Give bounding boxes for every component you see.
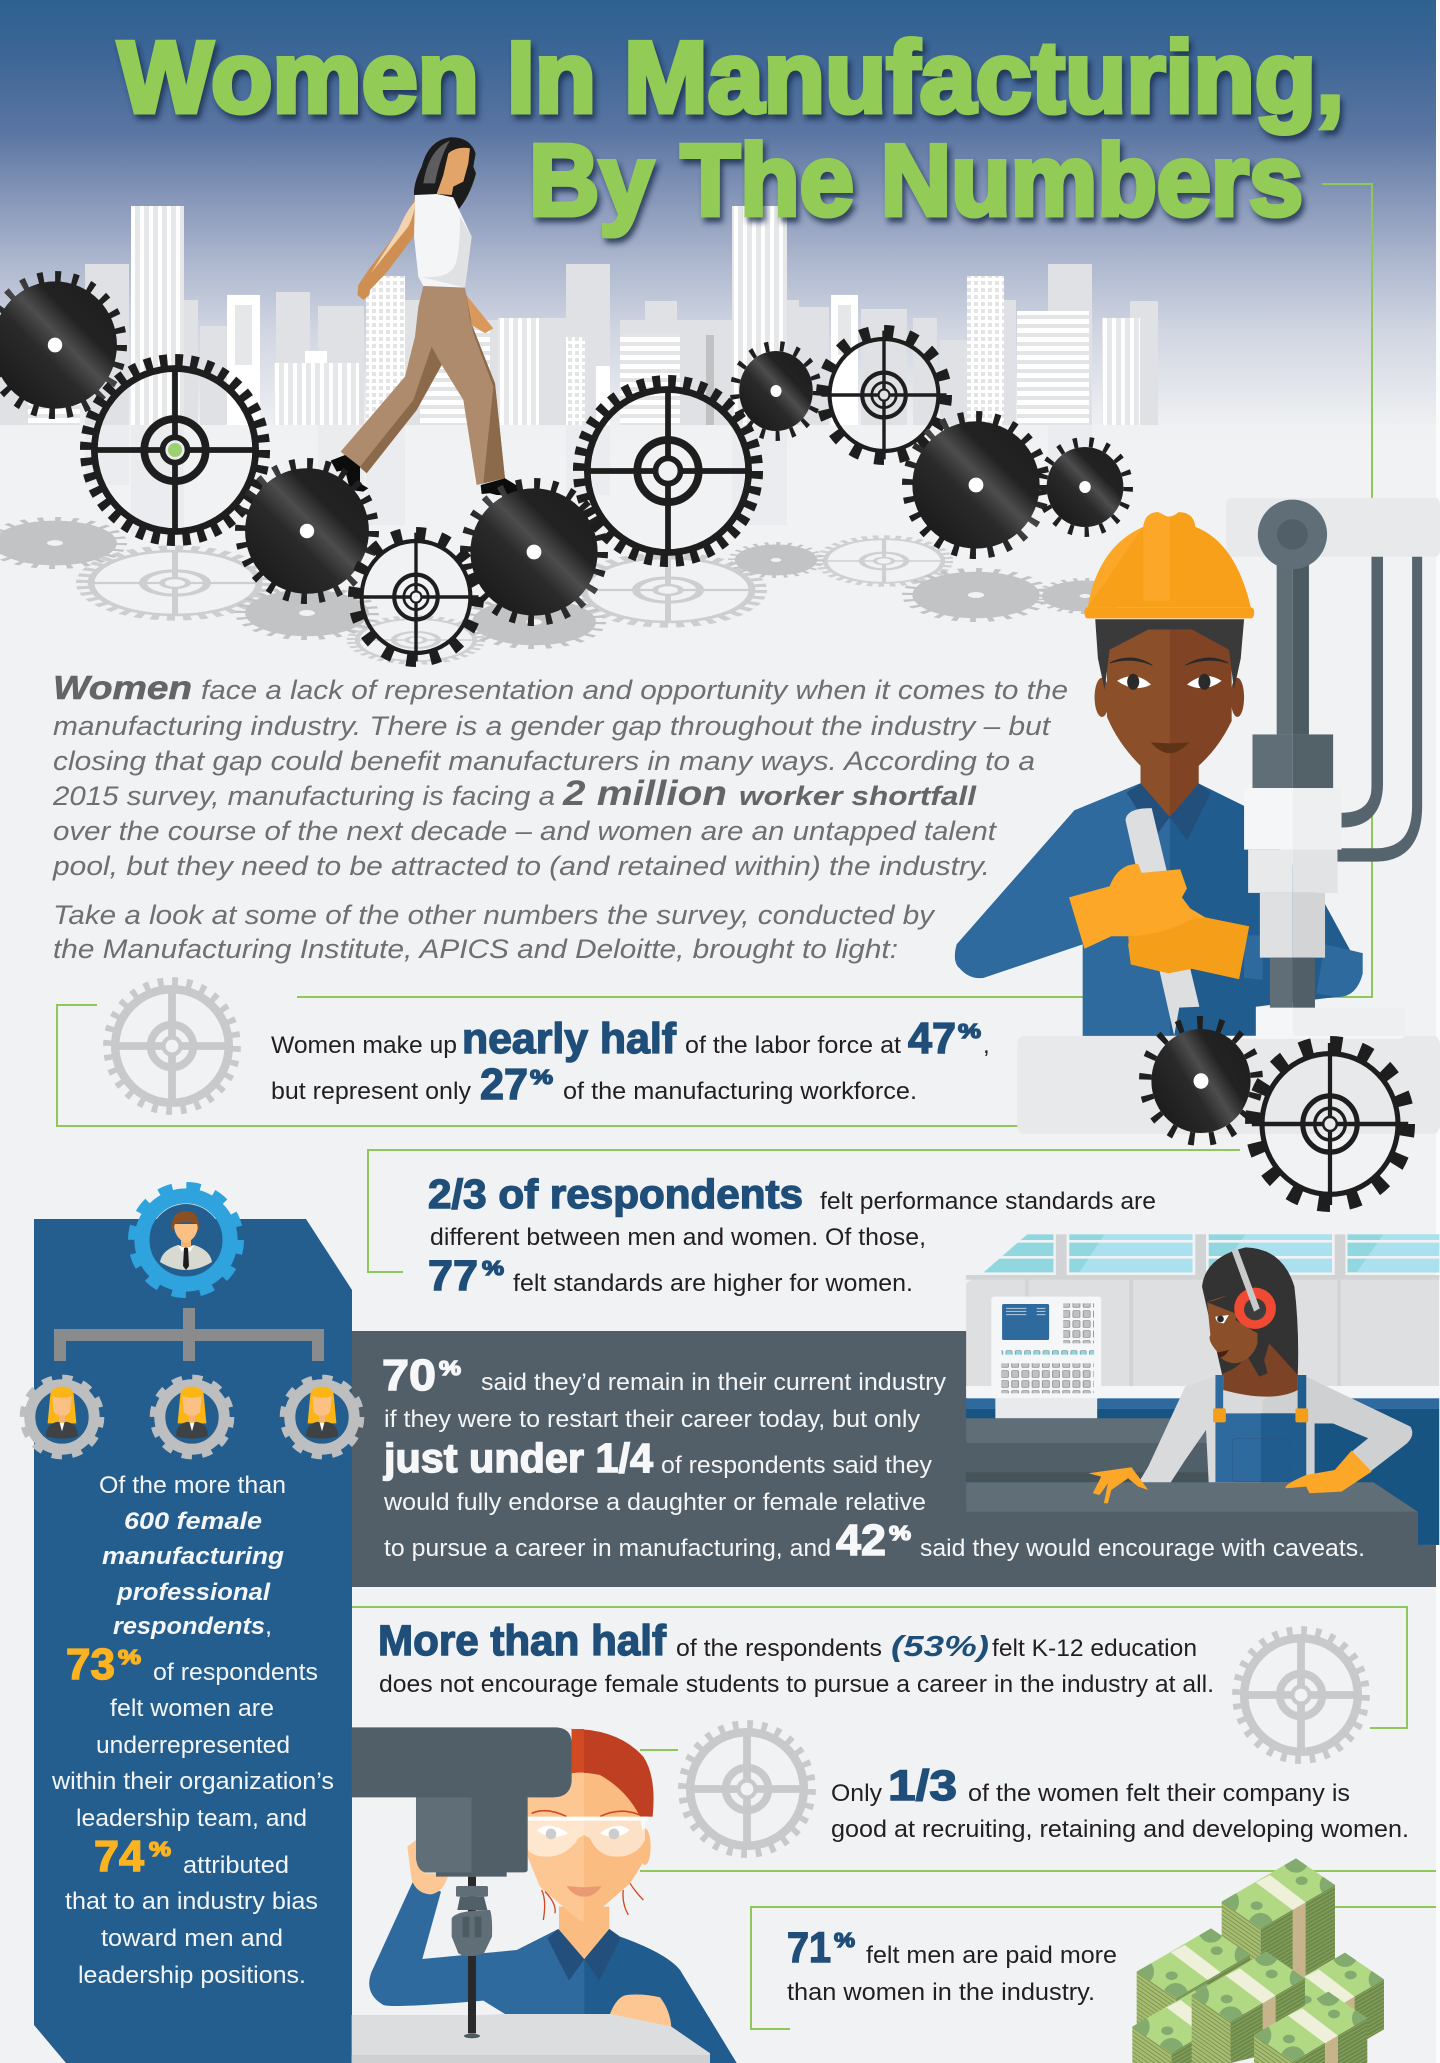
sidebar text: 74 <box>94 1832 145 1881</box>
icon: gray gear, labor force <box>108 982 236 1110</box>
stat: only 1/3: good at recruiting, retaining and developing women. <box>831 1816 1409 1843</box>
stat: more than half <box>378 1617 1214 1698</box>
hair back, neck, face <box>1202 1247 1298 1377</box>
stat: 71 percent <box>787 1924 1117 2006</box>
stat: 2/3 of respondents: different between men and women. Of those, <box>430 1224 926 1251</box>
control panel <box>995 1398 1097 1418</box>
stat: 2/3 of respondents: felt performance standards are <box>820 1188 1156 1215</box>
sidebar text: leadership positions. <box>78 1962 306 1989</box>
neck and face <box>559 1907 609 1959</box>
intro paragraph: the Manufacturing Institute, APICS and Deloitte, brought to light: <box>53 934 898 964</box>
goggles <box>537 1826 630 1837</box>
trousers <box>341 286 505 485</box>
title: By The Numbers <box>529 125 1303 237</box>
sidebar text: underrepresented <box>96 1732 290 1759</box>
stat: 70 percent would remain: 70 <box>382 1351 436 1400</box>
illustration: stacks of money <box>1122 1847 1394 2063</box>
stat: only 1/3: Only <box>831 1780 882 1807</box>
machine counters <box>966 1418 1235 1443</box>
overalls <box>1215 1375 1306 1482</box>
stat: nearly half of the labor force <box>271 1014 990 1109</box>
stat: nearly half of the labor force: % <box>958 1021 981 1043</box>
stat: 71 percent: % <box>834 1930 855 1952</box>
intro paragraph: face a lack of representation and opportunity when it comes to the <box>201 675 1068 705</box>
stat: 70 percent would remain: 42 <box>836 1516 886 1565</box>
intro paragraph: 2 million <box>562 774 727 813</box>
intro paragraph: Take a look at some of the other numbers the survey, conducted by <box>53 900 936 930</box>
icon: female professional gear 2 <box>155 1380 229 1454</box>
stat: 70 percent would remain <box>382 1351 1365 1565</box>
stat: nearly half of the labor force: 27 <box>480 1060 528 1109</box>
intro paragraph: 2015 survey, manufacturing is facing a <box>52 781 555 811</box>
stat: only 1/3: of the women felt their company is <box>968 1780 1350 1807</box>
drill head <box>352 1727 572 1877</box>
intro paragraph <box>52 669 1068 964</box>
stat: 70 percent would remain: of respondents said they <box>661 1452 932 1479</box>
stat: nearly half of the labor force: of the labor force at <box>685 1032 901 1059</box>
hard hat <box>1088 512 1251 607</box>
stat: 70 percent would remain: % <box>889 1523 911 1545</box>
sky gradient <box>0 0 1436 440</box>
shirt <box>369 1881 737 2063</box>
stack 3 <box>1260 1942 1394 2063</box>
stat: 2/3 of respondents: % <box>482 1258 504 1280</box>
intro paragraph: pool, but they need to be attracted to (and retained within) the industry. <box>52 851 990 881</box>
stat: 2/3 of respondents: 77 <box>428 1252 478 1300</box>
table <box>352 2014 710 2063</box>
sidebar text: respondents , <box>113 1613 272 1640</box>
stat: 70 percent would remain: to pursue a career in manufacturing, and <box>384 1535 831 1562</box>
stat: 70 percent would remain: if they were to restart their career today, but only <box>384 1406 920 1433</box>
machine <box>1226 498 1440 557</box>
stat: more than half: of the respondents <box>676 1635 882 1662</box>
headphones <box>1234 1288 1276 1329</box>
icon: female professional gear 1 <box>25 1380 99 1454</box>
handle <box>1125 808 1199 1036</box>
stat: 2/3 of respondents: felt standards are higher for women. <box>513 1270 913 1297</box>
chuck and bit <box>468 1877 476 2033</box>
stat: nearly half of the labor force: % <box>530 1067 553 1089</box>
intro paragraph: over the course of the next decade – and women are an untapped talent <box>53 816 998 846</box>
stat: 2/3 of respondents <box>428 1171 1156 1300</box>
skin <box>437 148 470 195</box>
sidebar text: toward men and <box>101 1925 283 1952</box>
windows <box>984 1234 1053 1272</box>
stack 2 <box>1126 1917 1260 2052</box>
stat: more than half: does not encourage female students to pursue a career in the industry at all. <box>379 1671 1214 1698</box>
illustration: factory worker with headphones <box>966 1234 1439 1545</box>
stat: 70 percent would remain: just under 1/4 <box>383 1435 653 1481</box>
sidebar text: of respondents <box>153 1659 318 1686</box>
wall <box>966 1275 1439 1390</box>
icon: gray gear, education <box>1237 1631 1365 1759</box>
stat: more than half: felt K-12 education <box>992 1635 1197 1662</box>
sidebar text: Of the more than <box>99 1472 286 1499</box>
shoes <box>331 455 368 492</box>
illustration: red-haired machinist <box>352 1727 737 2063</box>
sidebar text: that to an industry bias <box>65 1888 318 1915</box>
sidebar text: within their organization’s <box>51 1768 334 1795</box>
stack 5 <box>1181 1941 1315 2063</box>
intro paragraph: Women <box>53 669 192 706</box>
sidebar text: % <box>149 1839 171 1861</box>
sidebar text: manufacturing <box>102 1543 284 1570</box>
hair <box>1095 619 1244 690</box>
intro paragraph: worker shortfall <box>739 781 977 811</box>
icon: female professional gear 3 <box>285 1380 359 1454</box>
hair <box>528 1729 654 1817</box>
illustration: welder at drill press <box>955 498 1440 1134</box>
sidebar text: 600 female <box>124 1508 262 1535</box>
hair <box>414 137 476 212</box>
sidebar text: professional <box>116 1579 271 1606</box>
panel: dark gray survey panel <box>352 1331 1436 1587</box>
shirt <box>955 784 1363 1036</box>
stat: 70 percent would remain: said they would encourage with caveats. <box>920 1535 1365 1562</box>
small gears by the welder <box>1135 1012 1408 1205</box>
stack 6 <box>1243 1981 1377 2063</box>
top <box>414 194 472 288</box>
sidebar text <box>51 1472 334 1989</box>
stat: 2/3 of respondents: 2/3 of respondents <box>428 1171 803 1217</box>
sidebar text: attributed <box>183 1852 289 1879</box>
title: Women In Manufacturing, <box>118 22 1344 134</box>
stat: only 1/3 <box>831 1762 1409 1843</box>
sidebar text: 73 <box>66 1640 115 1689</box>
icon: gray gear, recruiting <box>683 1725 811 1853</box>
stat: nearly half of the labor force: of the manufacturing workforce. <box>563 1078 917 1105</box>
sidebar text: leadership team, and <box>76 1805 307 1832</box>
org chart connector <box>54 1308 324 1361</box>
collar <box>1126 784 1170 837</box>
illustration: walking woman <box>331 137 530 496</box>
gear reflections <box>0 519 1131 663</box>
stat: nearly half of the labor force: Women make up <box>271 1032 457 1059</box>
stat: nearly half of the labor force: , <box>983 1032 990 1059</box>
hands <box>407 1830 449 1894</box>
intro paragraph: manufacturing industry. There is a gender gap throughout the industry – but <box>53 711 1052 741</box>
stat: more than half: (53%) <box>891 1631 989 1663</box>
sidebar text: % <box>118 1647 141 1669</box>
machine column <box>1277 565 1293 734</box>
stat: nearly half of the labor force: but represent only <box>271 1078 471 1105</box>
stat: more than half: More than half <box>378 1617 667 1665</box>
stack 4 <box>1122 1972 1256 2063</box>
stack 1 <box>1211 1847 1345 2002</box>
stat: 70 percent would remain: would fully endorse a daughter or female relative <box>383 1489 926 1516</box>
intro paragraph: closing that gap could benefit manufacturers in many ways. According to a <box>53 746 1035 776</box>
title <box>118 22 1344 237</box>
stat: 71 percent: felt men are paid more <box>866 1942 1117 1969</box>
torso and arms <box>1138 1377 1412 1483</box>
eyes and mouth <box>1117 676 1151 688</box>
stat: nearly half of the labor force: 47 <box>908 1014 956 1063</box>
stat: 70 percent would remain: said they’d remain in their current industry <box>481 1369 946 1396</box>
stat: only 1/3: 1/3 <box>888 1762 957 1810</box>
gloves <box>1069 864 1249 979</box>
panel: blue sidebar <box>34 1219 352 2063</box>
gloves <box>1088 1467 1148 1503</box>
neck and face <box>1141 748 1199 817</box>
gears row <box>0 277 1128 661</box>
icon: manager in blue gear <box>136 1190 236 1290</box>
stat: 71 percent: than women in the industry. <box>787 1979 1095 2006</box>
sidebar text: felt women are <box>110 1695 274 1722</box>
front bench <box>966 1482 1418 1545</box>
stat: 71 percent: 71 <box>787 1924 831 1972</box>
stat: nearly half of the labor force: nearly half <box>462 1015 677 1063</box>
stat: 70 percent would remain: % <box>439 1358 461 1380</box>
city skyline <box>0 206 1436 545</box>
